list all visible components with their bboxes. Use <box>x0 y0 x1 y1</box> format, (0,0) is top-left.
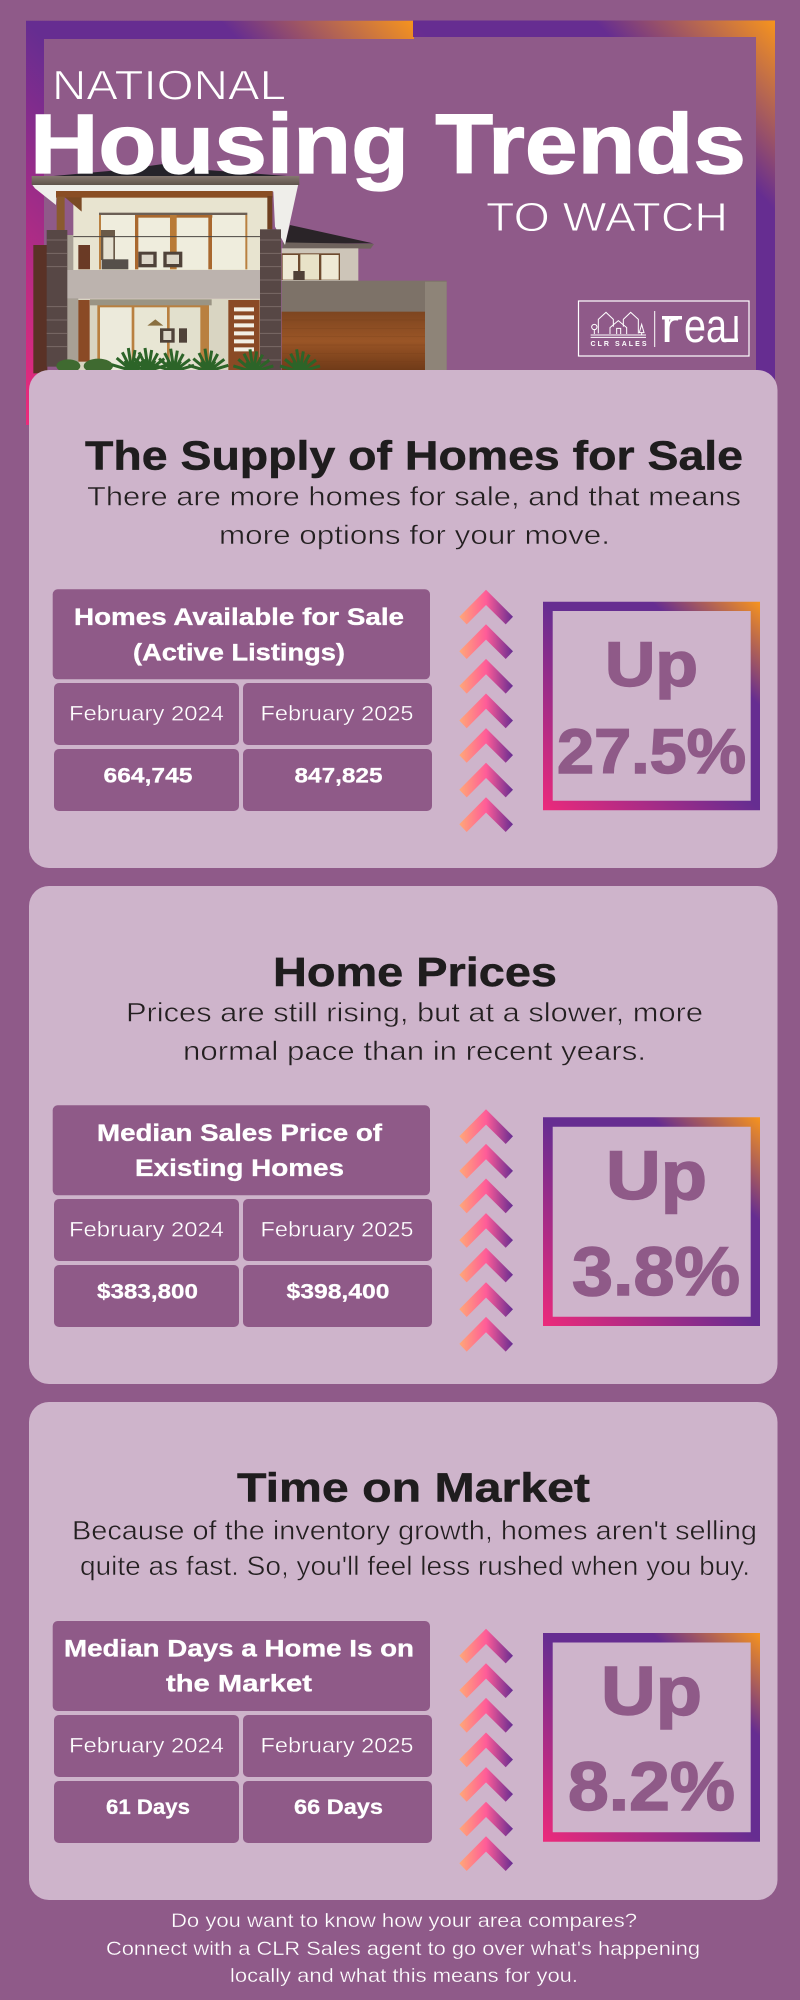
stat callout: up 8.2%: Up <box>601 1652 702 1729</box>
data table <box>53 1621 432 1843</box>
cell: February 2025 <box>243 1199 432 1261</box>
footer call to action: Connect with a CLR Sales agent to go over what's happening <box>106 1938 700 1960</box>
data table <box>53 1105 432 1327</box>
description: There are more homes for sale, and that means <box>87 482 741 512</box>
cell: $398,400 <box>243 1265 432 1327</box>
cell: 847,825: 847,825 <box>294 765 383 788</box>
panel: supply of homes <box>29 370 778 868</box>
title line: to watch: TO WATCH <box>486 194 728 240</box>
description: quite as fast. So, you'll feel less rushed when you buy. <box>80 1551 750 1581</box>
main title: housing trends: Housing Trends <box>30 97 746 191</box>
panel background <box>29 1402 778 1900</box>
stat callout: up 27.5%: Up <box>605 630 698 700</box>
heading: Time on Market <box>237 1465 590 1511</box>
footer call to action: locally and what this means for you. <box>230 1965 578 1987</box>
logo text: real: e <box>684 299 706 352</box>
cell: 66 Days <box>243 1781 432 1843</box>
stat callout: up 3.8% <box>543 1117 760 1326</box>
cell: February 2024: February 2024 <box>69 1218 224 1242</box>
description <box>126 998 703 1066</box>
cell: February 2025: February 2025 <box>260 1218 414 1242</box>
table title: Median Sales Price of <box>97 1120 383 1147</box>
upper storey <box>73 197 270 271</box>
brick pillars <box>47 230 67 367</box>
table title: Existing Homes <box>135 1155 344 1182</box>
left wall and brick <box>33 245 47 373</box>
table title <box>53 1105 430 1195</box>
icon: rising chevrons <box>459 1109 513 1352</box>
description: more options for your move. <box>219 520 610 550</box>
panel: time on market <box>29 1402 778 1900</box>
icon: rising chevrons <box>459 590 513 832</box>
table title <box>53 1621 430 1711</box>
logo text: real: l <box>732 309 740 350</box>
logo text: real: a <box>706 299 728 352</box>
balcony <box>54 270 269 298</box>
logo: CLR Sales and Real <box>578 299 749 356</box>
stat callout: up 8.2%: 8.2% <box>568 1748 735 1825</box>
heading: Home Prices <box>273 949 557 995</box>
cell: February 2024: February 2024 <box>69 703 224 726</box>
cell: February 2024 <box>54 1715 239 1777</box>
table title: Median Days a Home Is on <box>64 1636 414 1663</box>
logo text: real <box>661 299 740 352</box>
garden plants <box>56 359 80 373</box>
table title: the Market <box>166 1671 312 1698</box>
cell: 66 Days: 66 Days <box>294 1796 383 1819</box>
gradient frame: left segment <box>26 21 414 425</box>
panel background <box>29 370 778 868</box>
table title: (Active Listings) <box>133 640 345 667</box>
house illustration <box>32 164 447 373</box>
lower storey <box>78 298 262 370</box>
gradient frame: right segment <box>413 20 775 400</box>
table title: Homes Available for Sale <box>74 604 404 631</box>
footer call to action: Do you want to know how your area compares? <box>171 1910 637 1932</box>
main roof <box>53 164 287 176</box>
table title <box>53 589 430 679</box>
description: Because of the inventory growth, homes aren't selling <box>72 1516 757 1546</box>
cell: $383,800: $383,800 <box>97 1280 198 1304</box>
description: Prices are still rising, but at a slower, more <box>126 998 703 1028</box>
cell: February 2024 <box>54 683 239 745</box>
right wing <box>285 225 373 243</box>
cell: 664,745 <box>54 749 239 811</box>
stat callout: up 8.2% <box>543 1633 760 1842</box>
icon: rising chevrons <box>459 1629 513 1871</box>
logo text: real: r <box>661 299 679 352</box>
cell: February 2025 <box>243 683 432 745</box>
cell: February 2024 <box>54 1199 239 1261</box>
cell: February 2025: February 2025 <box>260 703 414 726</box>
footer call to action <box>106 1910 700 1987</box>
header <box>26 20 775 425</box>
cell: 61 Days <box>54 1781 239 1843</box>
logo icon: houses <box>591 312 646 337</box>
cell: February 2024: February 2024 <box>69 1734 224 1757</box>
cell: 847,825 <box>243 749 432 811</box>
cell: 664,745: 664,745 <box>104 765 193 788</box>
heading: The Supply of Homes for Sale <box>85 432 743 478</box>
cell: $383,800 <box>54 1265 239 1327</box>
stat callout: up 3.8%: 3.8% <box>572 1233 740 1310</box>
cell: February 2025 <box>243 1715 432 1777</box>
description <box>72 1516 757 1581</box>
eaves and beams <box>32 184 298 245</box>
cell: $398,400: $398,400 <box>286 1280 390 1304</box>
cell: February 2025: February 2025 <box>260 1734 414 1757</box>
panel background <box>29 886 778 1384</box>
stat callout: up 27.5% <box>543 602 760 810</box>
description: normal pace than in recent years. <box>183 1036 646 1066</box>
data table <box>53 589 432 811</box>
stat callout: up 27.5%: 27.5% <box>557 717 746 787</box>
logo text: CLR Sales: CLR SALES <box>590 341 647 348</box>
stat callout: up 3.8%: Up <box>606 1137 707 1214</box>
panel: home prices <box>29 886 778 1384</box>
cell: 61 Days: 61 Days <box>106 1796 190 1819</box>
description <box>87 482 741 550</box>
title line: national: NATIONAL <box>52 62 286 108</box>
